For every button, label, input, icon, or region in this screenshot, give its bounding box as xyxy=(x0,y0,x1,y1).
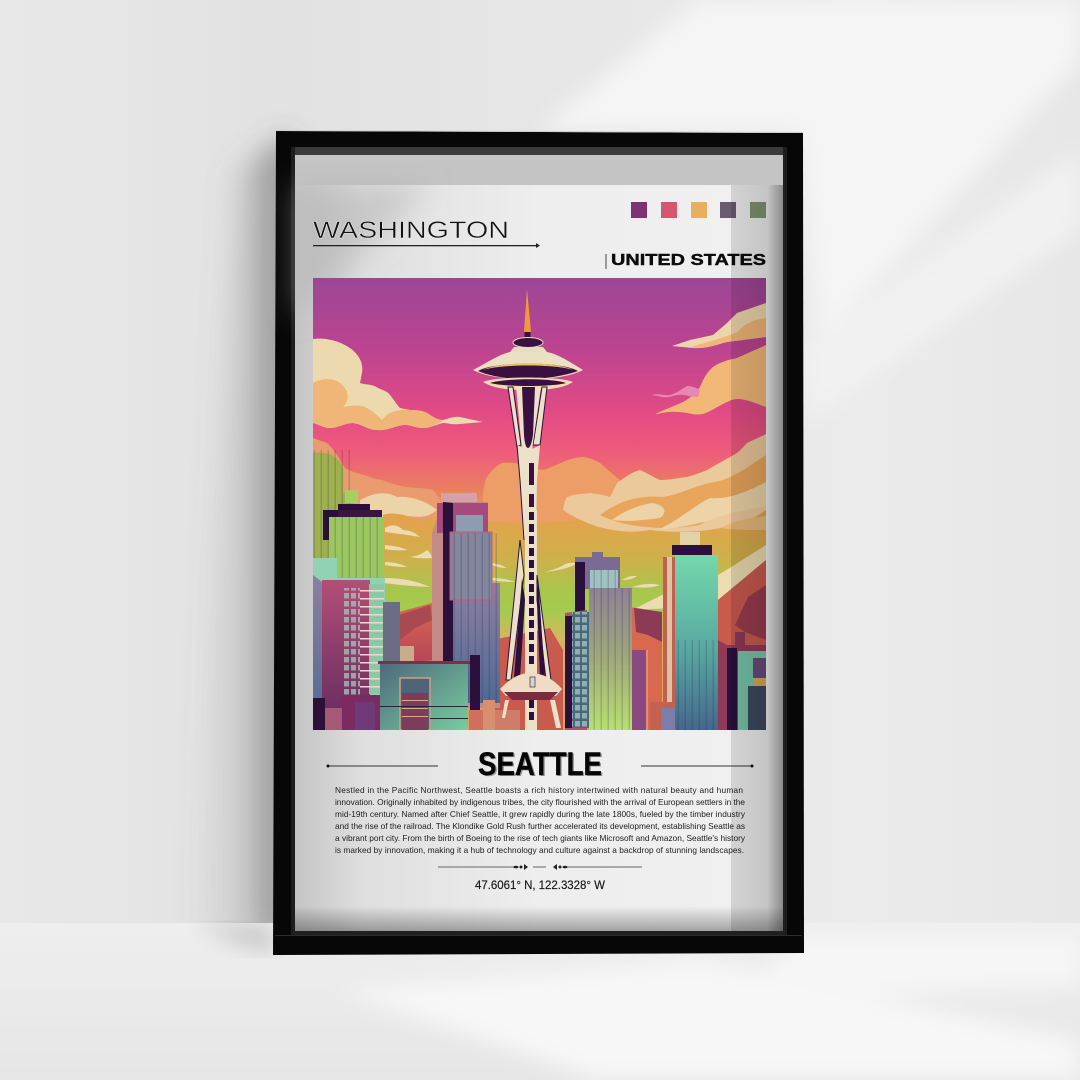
building: small slate block xyxy=(383,602,414,664)
needle spire xyxy=(524,289,531,332)
cloud wisps xyxy=(385,525,766,610)
heading: Washington xyxy=(313,217,540,248)
heading: Seattle: SEATTLE xyxy=(480,747,604,783)
lattice column xyxy=(525,510,537,730)
Space Needle xyxy=(473,289,583,730)
frame shadow xyxy=(190,135,290,955)
building: right purple tower xyxy=(565,552,632,730)
distant clouds centre xyxy=(483,457,625,523)
building: left rear green tower xyxy=(313,450,358,560)
glass reflection panel on right xyxy=(731,185,783,931)
building: thin mauve tower xyxy=(632,650,648,730)
history paragraph xyxy=(335,785,746,855)
base legs xyxy=(502,700,509,718)
heading: Washington: WASHINGTON xyxy=(313,217,509,244)
sky xyxy=(313,278,766,730)
history paragraph: Nestled in the Pacific Northwest, Seattle boasts a rich history intertwined with natural beauty and human xyxy=(335,785,743,795)
building: left lime tower xyxy=(323,504,383,579)
base platform xyxy=(500,673,562,696)
coordinates: 47.6061° N, 122.3328° W xyxy=(475,880,605,892)
history paragraph: is marked by innovation, making it a hub of technology and culture against a backdrop of stunning landscapes. xyxy=(335,845,744,855)
poster paper xyxy=(295,155,783,931)
history paragraph: innovation. Originally inhabited by indigenous tribes, the city flourished with the arrival of European settlers in the xyxy=(335,797,745,807)
building: left main tower xyxy=(313,558,385,730)
wall light patches xyxy=(540,0,1080,420)
illustration: Seattle skyline xyxy=(313,278,766,730)
lower disc xyxy=(483,378,573,390)
building: far right block xyxy=(718,632,766,730)
lower legs xyxy=(506,540,524,680)
top cap xyxy=(513,338,543,348)
waist xyxy=(517,445,540,540)
distant clouds left xyxy=(313,438,441,522)
building: lower green block xyxy=(378,655,480,730)
left title rule xyxy=(326,764,438,768)
heading: Seattle: SEATTLE xyxy=(478,746,602,782)
history paragraph: a vibrant port city. From the birth of Boeing to the rise of tech giants like Microsoft and Amazon, Seattle's history xyxy=(335,833,746,843)
right title rule xyxy=(641,764,754,768)
clouds upper right xyxy=(652,303,766,415)
building: right low block xyxy=(650,702,675,730)
saucer xyxy=(473,352,583,379)
core xyxy=(516,387,541,450)
upper legs xyxy=(508,387,521,447)
mountains xyxy=(399,560,766,730)
subheading: United States: UNITED STATES xyxy=(611,252,766,269)
ornamental divider xyxy=(438,864,642,870)
history paragraph: and the rise of the railroad. The Klondike Gold Rush further accelerated its development, establishing Seattle as xyxy=(335,821,745,831)
black frame xyxy=(273,130,804,955)
history paragraph: mid-19th century. Named after Chief Seattle, it grew rapidly during the late 1800s, fueled by the timber industry xyxy=(335,809,746,819)
building: low brick blocks xyxy=(469,700,520,730)
floor light patches xyxy=(340,935,1080,1080)
distant clouds right xyxy=(563,434,766,532)
floor xyxy=(0,923,1080,1080)
clouds upper left xyxy=(313,339,483,430)
building: central tall tower xyxy=(432,493,500,708)
colour palette swatches xyxy=(631,202,766,218)
building: right teal tower xyxy=(663,532,718,730)
